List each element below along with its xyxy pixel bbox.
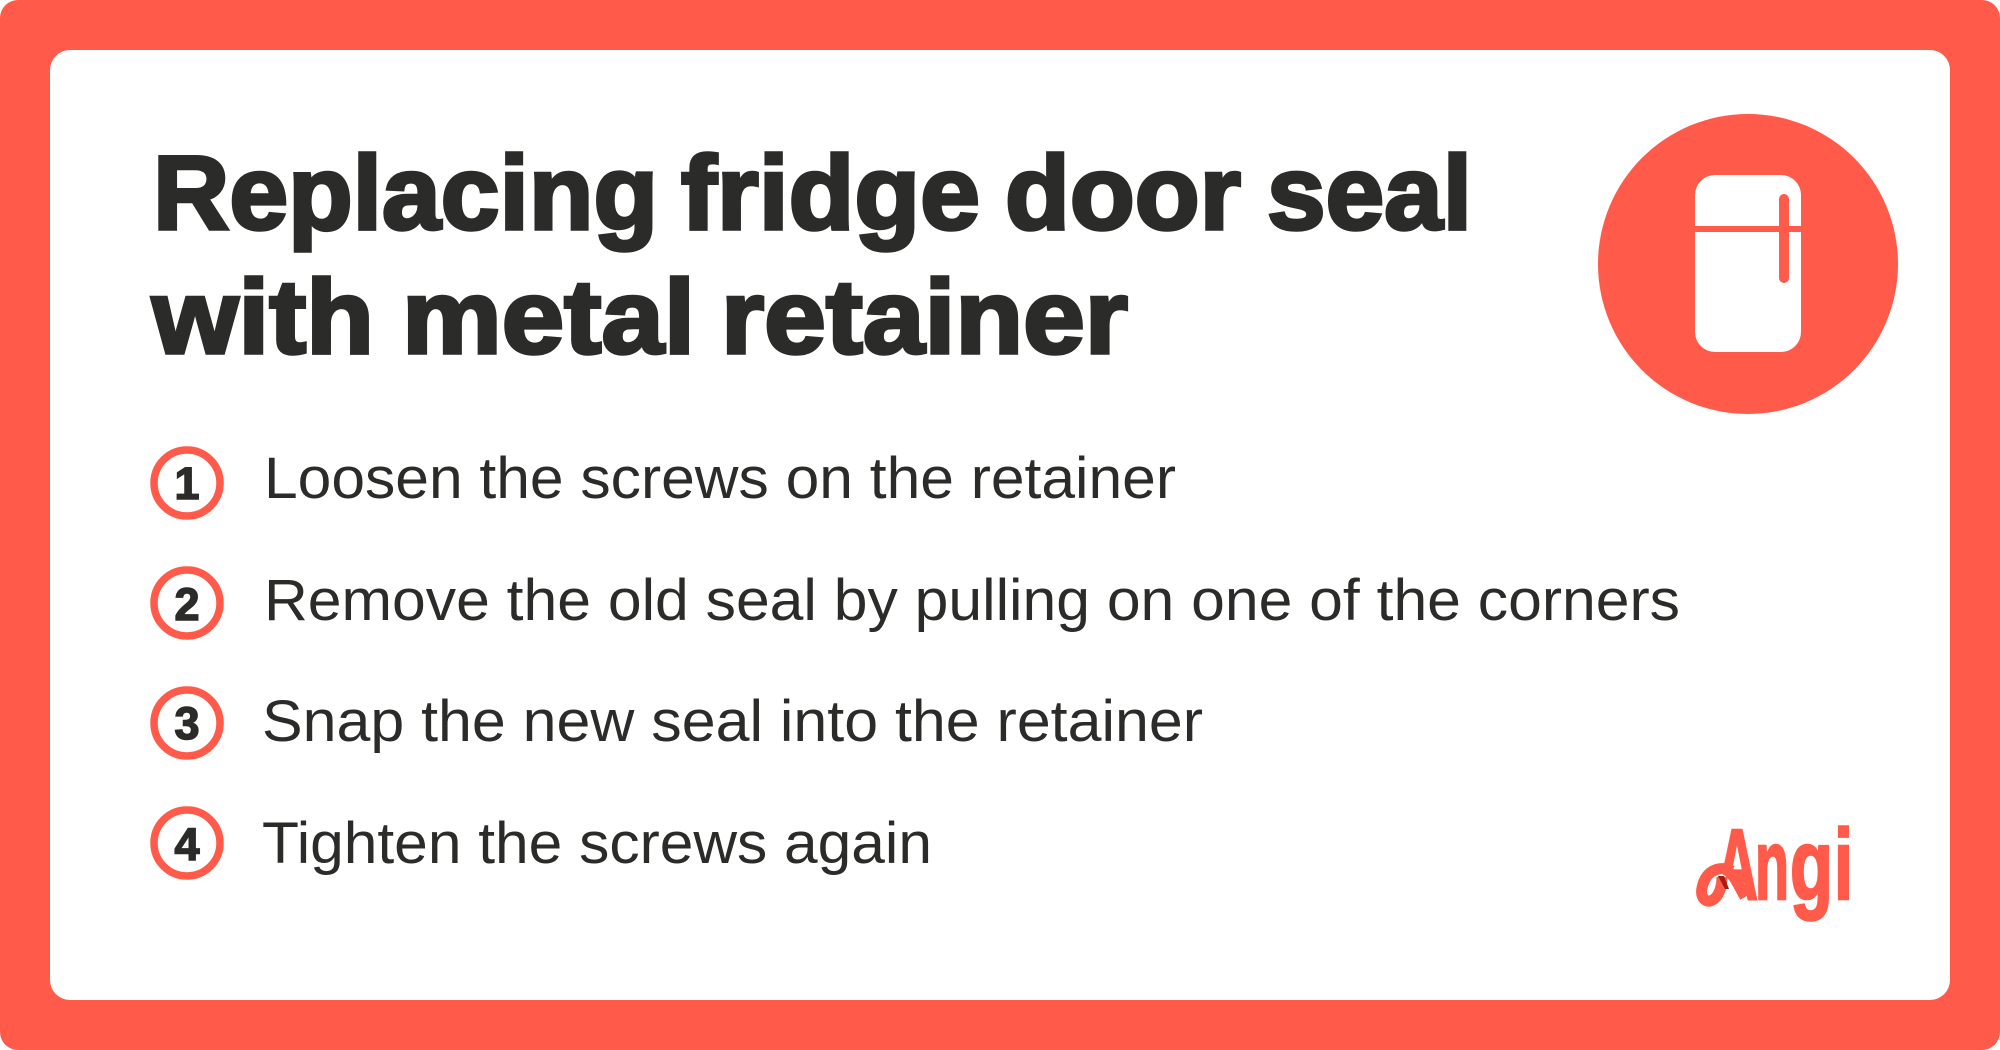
title: seal — [1267, 135, 1472, 252]
logo: Angi: n — [1755, 809, 1789, 921]
step 4: 4 — [174, 819, 200, 870]
step 3: Snap the new seal into the retainer — [262, 689, 1203, 754]
logo: Angi: g — [1790, 809, 1833, 921]
logo: Angi: A — [1716, 809, 1758, 921]
title — [151, 135, 1472, 376]
title: fridge — [681, 135, 980, 252]
icon: fridge in circle — [1598, 114, 1898, 414]
step 3: 3 — [174, 698, 200, 749]
step 2: Remove the old seal by pulling on one of the corners — [264, 568, 1680, 633]
title: door — [1005, 135, 1241, 252]
logo: Angi — [1696, 825, 1849, 922]
step 1: 1 — [174, 458, 200, 509]
title: retainer — [721, 259, 1128, 376]
logo: Angi: i — [1834, 809, 1853, 921]
title: with — [151, 259, 374, 376]
step 1: Loosen the screws on the retainer — [264, 446, 1176, 511]
step 4: Tighten the screws again — [262, 811, 932, 876]
title: metal — [402, 259, 695, 376]
step 2: 2 — [174, 579, 200, 630]
title: Replacing — [153, 135, 658, 252]
